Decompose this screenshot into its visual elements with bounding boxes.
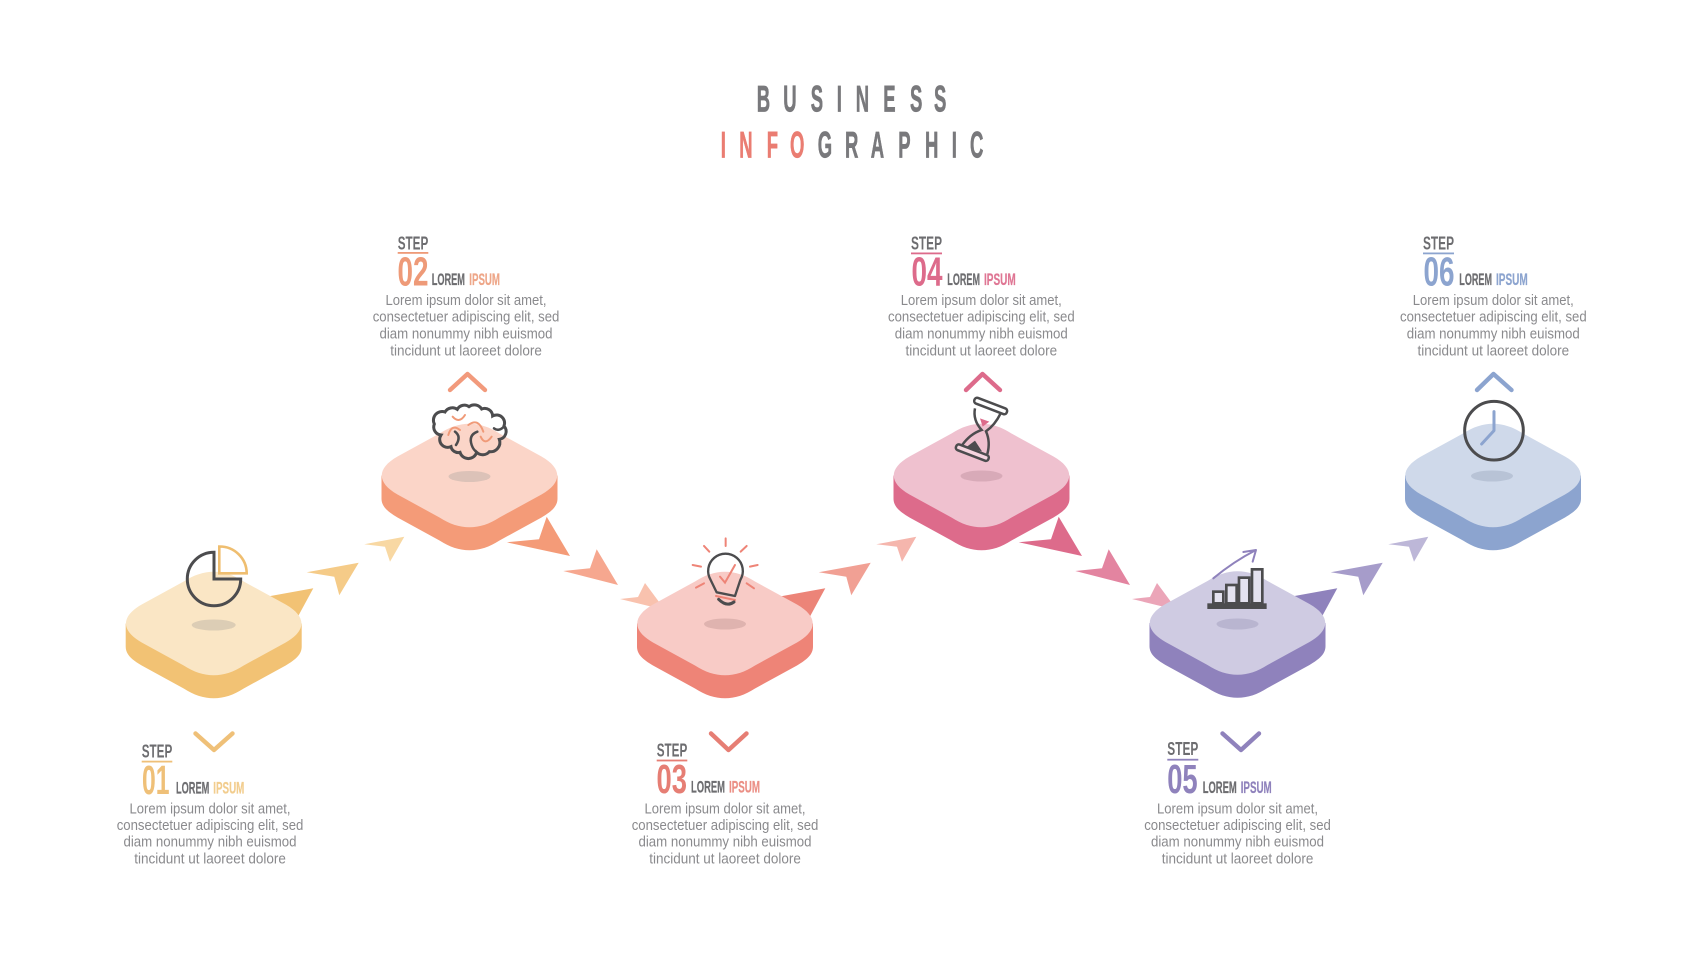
- label: step 3: 03: [656, 756, 687, 802]
- label: step 4: consectetuer adipiscing elit, sed: [888, 310, 1075, 326]
- label: step 2: tincidunt ut laoreet dolore: [390, 343, 542, 359]
- label: step 1: tincidunt ut laoreet dolore: [134, 851, 286, 867]
- block: step 1: [126, 572, 302, 698]
- title: [721, 80, 983, 166]
- icon: pie chart: [187, 546, 247, 606]
- label: step 1: Lorem ipsum dolor sit amet,: [130, 801, 290, 817]
- label: step 4: diam nonummy nibh euismod: [895, 326, 1068, 342]
- label: step 5: [1144, 738, 1331, 867]
- label: step 5: LOREM: [1203, 779, 1237, 797]
- label: step 1: [117, 740, 303, 867]
- label: step 3: tincidunt ut laoreet dolore: [649, 851, 801, 867]
- label: step 6: IPSUM: [1496, 271, 1528, 289]
- label: step 2: IPSUM: [469, 271, 500, 289]
- block: step 2: [382, 424, 558, 550]
- label: step 1: consectetuer adipiscing elit, sed: [117, 818, 303, 834]
- label: step 2: Lorem ipsum dolor sit amet,: [386, 293, 546, 309]
- title line: infographic: INFO: [721, 126, 804, 166]
- arrows: step 4 to step 5: [1019, 517, 1177, 610]
- arrows: step 3 to step 4: [777, 537, 916, 622]
- label: step 3: [632, 740, 818, 867]
- label: step 1: 01: [142, 757, 170, 803]
- label: step 6: consectetuer adipiscing elit, sed: [1400, 310, 1587, 326]
- label: step 4: Lorem ipsum dolor sit amet,: [901, 293, 1062, 309]
- arrows: step 2 to step 3: [507, 517, 665, 610]
- icon: clock: [1465, 401, 1523, 460]
- label: step 2: STEP: [398, 232, 428, 253]
- label: step 6: tincidunt ut laoreet dolore: [1418, 343, 1569, 359]
- label: step 4: LOREM: [947, 271, 980, 289]
- label: step 4: IPSUM: [984, 271, 1016, 289]
- label: step 4: STEP: [911, 232, 942, 253]
- label: step 5: IPSUM: [1241, 779, 1272, 797]
- block: step 6: [1405, 424, 1581, 550]
- title line: infographic: GRAPHIC: [818, 126, 983, 166]
- label: step 1: LOREM: [176, 779, 209, 797]
- label: step 6: STEP: [1423, 232, 1454, 253]
- label: step 5: STEP: [1167, 738, 1198, 759]
- label: step 4: 04: [912, 249, 943, 295]
- label: step 6: diam nonummy nibh euismod: [1407, 326, 1580, 342]
- label: step 1: IPSUM: [213, 779, 244, 797]
- label: step 2: diam nonummy nibh euismod: [380, 326, 552, 342]
- icon: light bulb: [693, 538, 758, 604]
- label: step 3: IPSUM: [729, 779, 760, 797]
- block: step 4: [894, 424, 1070, 550]
- label: step 2: 02: [398, 248, 428, 294]
- chevrons: [196, 374, 1512, 750]
- label: step 3: LOREM: [691, 779, 725, 797]
- label: step 5: diam nonummy nibh euismod: [1151, 835, 1324, 851]
- icon: bar chart with arrow: [1207, 550, 1267, 609]
- label: step 2: consectetuer adipiscing elit, sed: [373, 310, 559, 326]
- arrows: step 5 to step 6: [1289, 537, 1428, 622]
- block: step 5: [1150, 571, 1326, 698]
- label: step 5: 05: [1167, 756, 1198, 802]
- label: step 4: [888, 232, 1075, 359]
- label: step 2: [373, 232, 559, 359]
- label: step 1: diam nonummy nibh euismod: [124, 835, 296, 851]
- label: step 4: tincidunt ut laoreet dolore: [906, 343, 1057, 359]
- label: step 6: 06: [1424, 249, 1454, 295]
- label: step 1: STEP: [142, 740, 172, 761]
- arrows: step 1 to step 2: [265, 537, 404, 622]
- icon: brain: [433, 405, 506, 459]
- label: step 5: tincidunt ut laoreet dolore: [1162, 851, 1313, 867]
- label: step 5: consectetuer adipiscing elit, sed: [1144, 818, 1331, 834]
- label: step 5: Lorem ipsum dolor sit amet,: [1157, 801, 1318, 817]
- label: step 3: Lorem ipsum dolor sit amet,: [644, 801, 806, 817]
- block: step 3: [637, 572, 813, 698]
- label: step 6: Lorem ipsum dolor sit amet,: [1413, 293, 1574, 309]
- label: step 3: consectetuer adipiscing elit, sed: [632, 818, 818, 834]
- icon: hourglass: [955, 397, 1008, 462]
- title line: business: BUSINESS: [757, 80, 946, 121]
- label: step 6: [1400, 232, 1587, 359]
- label: step 3: diam nonummy nibh euismod: [638, 835, 812, 851]
- label: step 3: STEP: [657, 740, 687, 761]
- label: step 6: LOREM: [1459, 271, 1492, 289]
- label: step 2: LOREM: [432, 271, 465, 289]
